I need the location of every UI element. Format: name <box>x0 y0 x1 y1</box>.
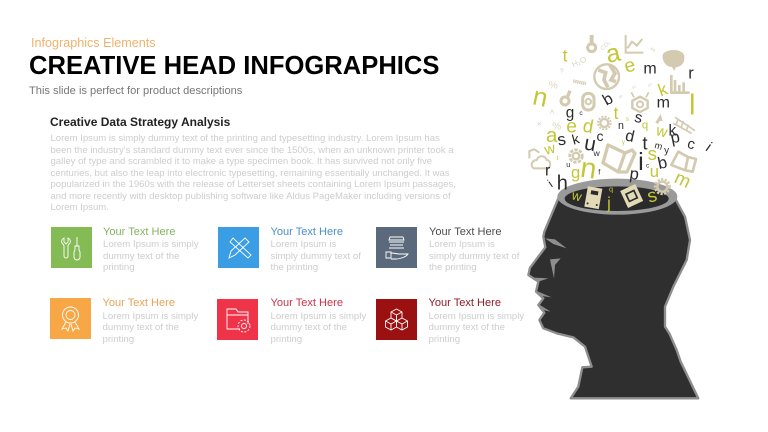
letters: n <box>579 152 599 186</box>
floating letters and icons: i <box>638 148 644 176</box>
letters: j <box>606 193 611 212</box>
floating letters and icons: m <box>643 61 657 78</box>
floating letters and icons: m <box>657 95 670 112</box>
card text: green: printing <box>103 262 135 273</box>
paragraph: Lorem Ipsum. <box>50 202 109 213</box>
floating letters and icons: m <box>653 140 664 152</box>
head silhouette <box>528 179 698 398</box>
letters: a <box>546 124 558 147</box>
floating letters and icons: CO₂ <box>600 40 613 52</box>
tan icons <box>529 35 696 209</box>
paragraph: centuries, but also the leap into electronic typesetting, remaining essentially unchanged. It was <box>50 168 450 179</box>
floating letters and icons: ∞ <box>618 94 625 101</box>
floating letters and icons: d <box>624 128 636 146</box>
icon: hexagon molecule <box>632 97 648 112</box>
icon: gear <box>600 119 608 127</box>
floating letters and icons: t <box>642 132 648 153</box>
card text: orange: dummy text of the <box>102 322 179 333</box>
card text: blue: Lorem Ipsum is <box>270 239 336 250</box>
floating letters and icons: n <box>618 120 624 132</box>
card text: dark red: Lorem Ipsum is simply <box>428 311 524 322</box>
floating letters and icons: × <box>537 119 542 129</box>
floating letters and icons: % <box>552 121 561 132</box>
letters: w <box>542 140 557 159</box>
letters: q <box>609 184 613 193</box>
letters: w <box>569 187 584 204</box>
icon tile: hand holding stack <box>376 227 417 268</box>
title: CREATIVE HEAD INFOGRAPHICS <box>29 52 439 80</box>
card text: green: Lorem Ipsum is simply <box>103 239 199 250</box>
floating letters and icons: c <box>685 136 697 153</box>
letters: s <box>645 184 659 207</box>
letters: t <box>563 46 568 66</box>
card text: red <box>270 297 366 345</box>
icon: globe <box>594 64 619 89</box>
icon: open book <box>603 145 635 172</box>
subtitle: This slide is perfect for product descriptions <box>29 84 242 96</box>
paragraph: and more recently with desktop publishing software like Aldus PageMaker including versions of <box>50 191 451 202</box>
icon tile: tools <box>50 227 92 268</box>
floating letters and icons: b <box>600 90 616 109</box>
letters: l <box>689 90 695 122</box>
paragraph: galley of type and scrambled it to make a type specimen book. It has survived not only five <box>50 156 432 167</box>
floating letters and icons: f <box>598 167 601 176</box>
icon: cloud <box>529 149 550 168</box>
floating letters and icons: c <box>596 128 603 144</box>
icon: card in head <box>620 184 643 208</box>
card text: red: dummy text of the <box>270 322 347 333</box>
icon: gear on rim <box>657 182 667 192</box>
letters: s <box>648 143 657 164</box>
floating letters and icons: c <box>579 110 583 117</box>
card text: green: dummy text of the <box>103 251 180 262</box>
floating letters and icons: u <box>583 132 598 156</box>
card text: slate: simply dummy text of <box>429 251 519 262</box>
card text: blue: Your Text Here <box>270 226 343 238</box>
floating letters and icons: r <box>688 63 694 82</box>
icon: clock <box>583 93 594 110</box>
icon tile: award ribbon <box>50 298 91 339</box>
card text: slate: Lorem Ipsum is <box>429 239 495 250</box>
card text: blue: simply dummy text of <box>270 251 361 262</box>
card text: blue: the printing <box>270 262 318 273</box>
floating letters and icons: w <box>593 148 601 158</box>
letters: t <box>557 156 559 162</box>
floating letters and icons: ∞ <box>631 84 638 92</box>
floating letters and icons: g <box>566 104 574 121</box>
card text: red: Your Text Here <box>270 297 343 309</box>
floating letters and icons: ∞ <box>647 82 654 89</box>
icon tile: folder with gear <box>217 298 258 340</box>
card text: orange: Lorem Ipsum is simply <box>102 311 198 322</box>
paragraph: popularized in the 1960s with the release of Letterset sheets containing Lorem Ipsum passages, <box>50 179 456 190</box>
floating letters and icons: k <box>570 130 582 148</box>
icon: phone in head <box>584 186 602 209</box>
card text: slate: the printing <box>429 262 477 273</box>
letters: d <box>581 115 595 137</box>
floating letters and icons: r <box>545 163 551 180</box>
paragraph: been the industry's standard dummy text ever since the 1500s, when an unknown printer took a <box>50 145 454 156</box>
floating letters and icons: s <box>556 129 567 150</box>
card text: dark red <box>428 297 524 345</box>
letters: m <box>671 167 694 192</box>
floating letters and icons: p <box>628 164 640 184</box>
icon: flower <box>573 153 579 159</box>
section heading: Creative Data Strategy Analysis <box>50 115 230 129</box>
floating letters and icons <box>529 35 714 212</box>
floating letters and icons: b <box>656 153 669 173</box>
icon: arrow <box>655 114 663 124</box>
letters: u <box>650 162 659 181</box>
floating letters and icons: i <box>545 177 555 190</box>
icon: dna <box>673 117 695 133</box>
letters <box>530 38 695 212</box>
letters: e <box>566 116 577 137</box>
card text: dark red: dummy text of the <box>428 322 505 333</box>
card text: green: Your Text Here <box>103 226 175 238</box>
letters: e <box>622 55 638 78</box>
icon: flask small <box>567 91 570 97</box>
icon: line chart <box>626 35 643 53</box>
card text: red: printing <box>270 334 302 345</box>
floating letters and icons: s <box>633 109 644 127</box>
paragraph <box>50 133 456 213</box>
letters: s <box>626 117 629 123</box>
floating letters and icons: % <box>549 80 558 91</box>
floating letters and icons: c <box>646 163 650 170</box>
floating letters and icons: H₂O <box>570 55 588 69</box>
card text: slate: Your Text Here <box>429 226 501 238</box>
eyebrow heading: Infographics Elements <box>31 36 156 50</box>
icon: small book <box>671 152 696 172</box>
letters: t <box>614 103 619 123</box>
floating letters and icons: u <box>566 160 570 169</box>
icon: flask top <box>586 35 598 46</box>
floating letters and icons: k <box>668 123 676 140</box>
letters: q <box>642 119 648 131</box>
faint bar mark <box>573 81 586 84</box>
icon: bar chart <box>671 75 690 93</box>
letters: g <box>571 163 580 182</box>
floating letters and icons: A <box>550 108 555 115</box>
floating letters and icons: y <box>664 145 669 156</box>
paragraph: Lorem Ipsum is simply dummy text of the printing and typesetting industry. Lorem Ipsum has <box>50 133 440 144</box>
icon: brain <box>663 50 684 71</box>
card text: slate <box>429 226 520 273</box>
floating letters and icons: h <box>557 172 568 194</box>
card text: orange <box>102 297 198 345</box>
card text: dark red: Your Text Here <box>428 297 501 309</box>
floating letters and icons: p <box>669 127 682 147</box>
icon tile: pencil and ruler <box>218 227 258 268</box>
card text: orange: printing <box>102 334 134 345</box>
letters: w <box>653 122 670 142</box>
floating letters and icons: ? <box>560 66 564 75</box>
card text: green <box>103 226 199 273</box>
floating letters and icons: ∞ <box>649 44 658 54</box>
letters: n <box>530 81 551 113</box>
card text: orange: Your Text Here <box>102 297 175 309</box>
letters: a <box>603 38 624 69</box>
letters: y <box>622 140 625 146</box>
card text: red: Lorem Ipsum is simply <box>270 311 366 322</box>
card text: blue <box>270 226 361 273</box>
letters: k <box>655 78 670 100</box>
icon tile: cubes <box>376 298 416 340</box>
floating letters and icons: i <box>702 140 714 155</box>
card text: dark red: printing <box>428 334 460 345</box>
